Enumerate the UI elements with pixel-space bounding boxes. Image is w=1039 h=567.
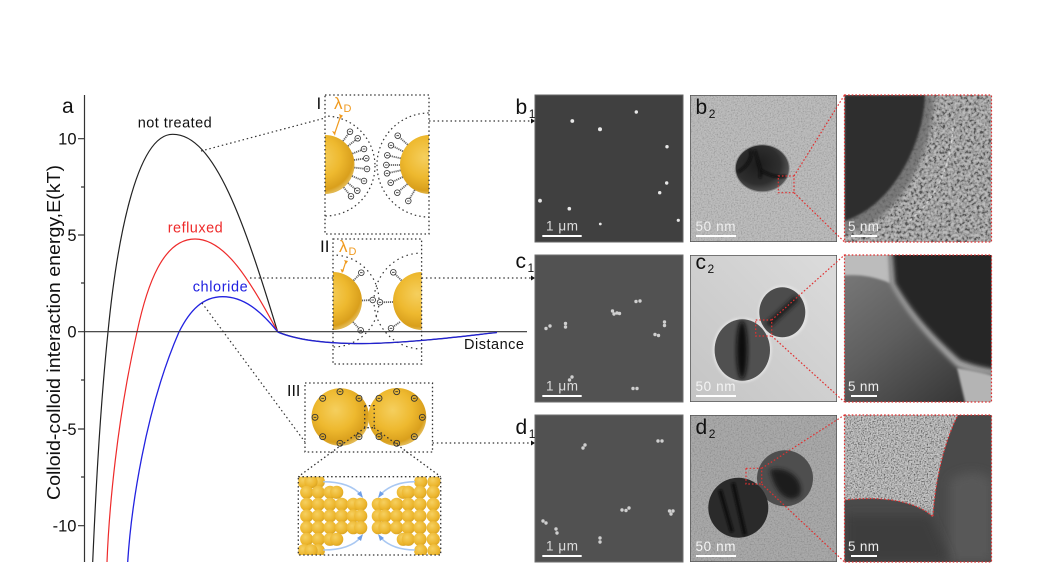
- diffusion arrows: [323, 482, 415, 550]
- gold spheres I: [325, 112, 429, 218]
- inset III frame and neck callout: [298, 383, 441, 477]
- arrowheads: [357, 491, 384, 541]
- gold spheres II: [333, 252, 422, 350]
- row c micrographs: [516, 248, 998, 410]
- panel b3: HRTEM: 5 nm: [848, 219, 879, 234]
- panel d1: SEM: 1 μm: [546, 539, 578, 554]
- panel c3: HRTEM: [844, 255, 992, 402]
- label d1: 1: [529, 427, 536, 441]
- panel d2: TEM: d: [696, 416, 707, 439]
- panel c2: TEM: 50 nm: [696, 379, 736, 394]
- debye length II: λ: [339, 237, 348, 256]
- debye length I: [332, 94, 352, 136]
- zoom callout b: [778, 95, 992, 242]
- panel b2: TEM: b: [696, 96, 707, 119]
- row b micrographs: [516, 95, 992, 242]
- curve labels: [138, 116, 248, 296]
- y tick labels: 5: [67, 227, 76, 245]
- atomic neck diagram: [297, 475, 441, 557]
- panel c3: HRTEM: 5 nm: [848, 379, 879, 394]
- label d1: d: [516, 416, 527, 439]
- debye length II: D: [348, 246, 356, 258]
- y tick labels: 10: [58, 131, 76, 149]
- connector arrowheads: [531, 118, 535, 446]
- panel d3: HRTEM: 5 nm: [848, 539, 879, 554]
- roman numeral II: II: [320, 237, 329, 256]
- label b1: b: [516, 96, 527, 119]
- curve: chloride: [128, 297, 278, 562]
- curve labels: refluxed: [168, 221, 223, 237]
- label c1: 1: [528, 261, 534, 275]
- inset I frame: [325, 95, 429, 234]
- charges I: [347, 129, 411, 204]
- label c1: c: [516, 250, 526, 273]
- zoom callout c: [756, 255, 992, 402]
- debye length II: [339, 237, 356, 273]
- ligands II: [353, 272, 402, 330]
- zoom callout d: [746, 415, 992, 562]
- panel c2: TEM: c: [696, 251, 706, 274]
- y axis with ticks: [78, 95, 84, 562]
- panel b1: SEM: 1 μm: [546, 219, 578, 234]
- y tick labels: 0: [67, 324, 76, 342]
- dotted connector lines: [201, 118, 532, 443]
- charges II: [358, 270, 396, 333]
- y tick labels: -10: [53, 518, 76, 536]
- y axis title: Colloid-colloid interaction energy,E(kT): [44, 165, 64, 500]
- panel c1: SEM: 1 μm: [546, 379, 578, 394]
- curve: refluxed: [107, 239, 278, 562]
- roman numeral I: I: [316, 94, 321, 113]
- inset I: ligand-capped particles: [318, 94, 430, 235]
- curve labels: not treated: [138, 116, 212, 132]
- debye length I: D: [344, 103, 352, 115]
- y tick labels: -5: [62, 421, 76, 439]
- panel d2: TEM: 50 nm: [696, 539, 736, 554]
- panel b2: TEM: 50 nm: [696, 219, 736, 234]
- inset II: refluxed particles: [322, 238, 422, 365]
- panel b2: TEM: 2: [709, 107, 716, 121]
- panel c2: TEM: 2: [708, 262, 714, 276]
- gold atoms: [297, 475, 441, 557]
- panel letter a: a: [62, 95, 74, 118]
- panel b3: HRTEM: [844, 95, 992, 242]
- panel b2: TEM: [690, 95, 837, 242]
- axis label: Distance: Distance: [464, 337, 524, 353]
- curve labels: chloride: [193, 280, 248, 296]
- curve: not treated: [93, 134, 278, 562]
- panel d3: HRTEM: [844, 415, 992, 562]
- panel c1: SEM: [535, 255, 683, 402]
- panel d1: SEM: [535, 415, 683, 562]
- panel a: energy chart: [44, 95, 278, 562]
- baseline and shallow energy wells: [84, 332, 527, 344]
- y tick labels: [53, 131, 76, 536]
- row d micrographs: [516, 415, 992, 562]
- charges III: [312, 389, 425, 446]
- panel d2: TEM: 2: [709, 427, 716, 441]
- atom box frame: [298, 477, 441, 555]
- debye length I: λ: [334, 94, 342, 113]
- label b1: 1: [529, 107, 536, 121]
- inset III: chloride particles in contact: [287, 383, 441, 477]
- ligands I: [343, 132, 415, 201]
- gold spheres III: [312, 388, 369, 446]
- roman numeral III: III: [287, 383, 300, 400]
- panel c2: TEM: [690, 251, 837, 402]
- inset II frame: [333, 239, 422, 364]
- panel b1: SEM: [535, 95, 683, 242]
- panel d2: TEM: [690, 415, 837, 562]
